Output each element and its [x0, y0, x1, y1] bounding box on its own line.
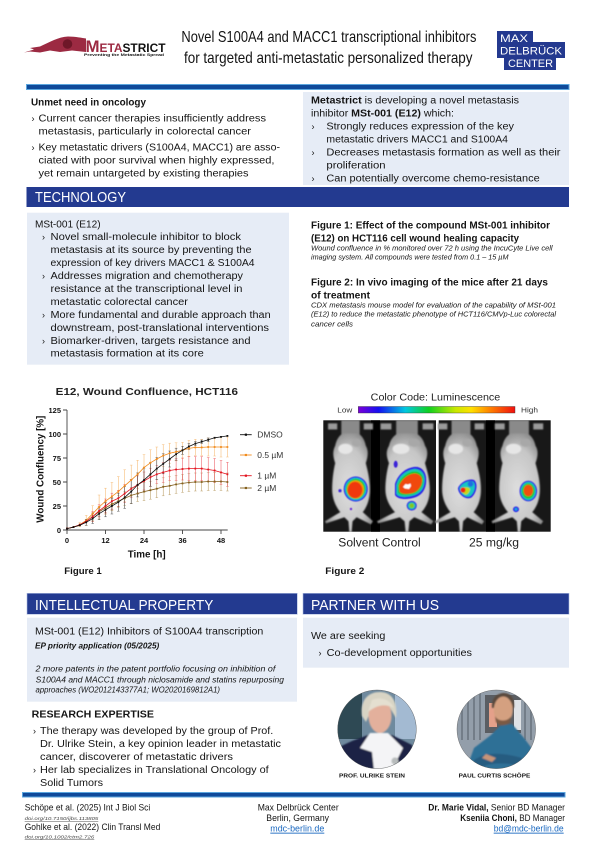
y axis tick labels: 100: [48, 430, 61, 439]
priority application: EP priority application (05/2025): [35, 640, 159, 650]
color scale: [337, 405, 538, 414]
intro text: inhibitor MSt-001 (E12) which:: [311, 109, 454, 120]
section header: technology: TECHNOLOGY: [35, 190, 126, 206]
x axis tick labels: 36: [178, 536, 187, 545]
mouse 4: [492, 420, 543, 534]
logo: Max Delbrück Center: MAX: [500, 33, 529, 45]
figure 2 caption: of treatment: [311, 290, 371, 301]
section header: intellectual property: INTELLECTUAL PROPERTY: [35, 598, 214, 614]
panel: MSt-001 (E12): [27, 213, 289, 365]
legend: [240, 431, 284, 493]
y axis tick labels: 75: [53, 454, 61, 463]
figure 2 label: Figure 2: [325, 566, 364, 576]
panel: unmet need in oncology: [31, 97, 280, 180]
figure 1 caption: Figure 1: Effect of the compound MSt-001 inhibitor: [311, 221, 550, 232]
panel: partner with us: ›: [318, 648, 322, 658]
panel: partner with us: We are seeking: [311, 631, 385, 642]
x axis tick labels: [65, 536, 225, 545]
bullet list: technology: Novel small-molecule inhibitor to block: [50, 232, 242, 243]
tumour signal mouse 2: [394, 461, 426, 511]
footer: references: [25, 803, 160, 839]
intro text: [311, 95, 519, 120]
y axis title: Wound Confluency [%]: [36, 416, 46, 523]
chart title: E12, Wound Confluence, HCT116: [56, 386, 238, 398]
logo: Max Delbrück Center: DELBRÜCK: [500, 46, 563, 58]
bullet list: technology: resistance at the transcriptional level in: [50, 284, 242, 295]
x axis tick labels: 12: [101, 536, 110, 545]
color scale: High: [521, 405, 538, 414]
y axis tick labels: 0: [57, 526, 61, 535]
error bars: 0.5 µM: [80, 437, 227, 527]
bullet list: expertise: [33, 726, 281, 789]
bullet list: unmet need: Key metastatic drivers (S100A4, MACC1) are asso-: [38, 143, 280, 154]
patent title: MSt-001 (E12) Inhibitors of S100A4 transcription: [35, 627, 263, 638]
bullet list: unmet need: ciated with poor survival when highly expressed,: [38, 156, 274, 167]
heading: unmet need: Unmet need in oncology: [31, 97, 146, 108]
bullet list: benefits: metastatic drivers MACC1 and S100A4: [326, 134, 508, 145]
caption: Paul Curtis Schöpe: PAUL CURTIS SCHÖPE: [459, 773, 531, 780]
title: Novel S100A4 and MACC1 transcriptional inhibitors: [181, 29, 476, 46]
portrait: Paul Curtis Schöpe: [456, 689, 536, 770]
series: 1 µM: [67, 469, 227, 529]
bullet list: benefits: [312, 122, 561, 185]
group labels: 25 mg/kg: [469, 538, 519, 550]
bullet list: technology: More fundamental and durable approach than: [50, 310, 271, 321]
footer: references: Gohlke et al. (2022) Clin Transl Med: [25, 822, 160, 833]
group labels: [338, 538, 519, 550]
figure: in vivo mouse imaging: [323, 393, 551, 550]
bullet list: benefits: ›: [312, 147, 314, 157]
logo: Max Delbrück Center: [497, 31, 565, 70]
bullet list: technology: ›: [42, 310, 45, 320]
legend: DMSO: [257, 431, 283, 440]
bullet list: technology: ›: [42, 232, 45, 242]
x axis title: Time [h]: [128, 550, 166, 561]
section header: partner with us: [303, 593, 569, 614]
mouse 1: [325, 420, 373, 534]
footer: address: Max Delbrück Center: [258, 803, 339, 813]
error bars: 2 µM: [93, 472, 227, 521]
bullet list: unmet need: [32, 114, 280, 180]
imaging panel: solvent control: [323, 420, 436, 534]
error bars: 1 µM: [93, 457, 227, 522]
bullet list: benefits: proliferation: [326, 160, 386, 171]
bullet list: expertise: Her lab specializes in Translational Oncology of: [40, 765, 269, 776]
series: 2 µM: [67, 482, 227, 529]
y axis tick labels: [48, 406, 61, 535]
footer: address: mdc-berlin.de: [270, 824, 324, 834]
figure 2 caption: CDX metastasis mouse model for evaluation of the capability of MSt-001: [311, 303, 556, 310]
y axis tick labels: 25: [53, 502, 61, 511]
bullet list: technology: Biomarker-driven, targets resistance and: [50, 336, 250, 347]
figure 1 label: Figure 1: [64, 566, 102, 576]
tumour signal mouse 3: [458, 480, 476, 498]
logo tagline: Preventing the Metastatic Spread: [84, 53, 164, 57]
figure 1 caption: [311, 221, 553, 262]
bullet list: technology: metastatic colorectal cancer: [50, 297, 189, 308]
bullet list: benefits: ›: [312, 122, 314, 132]
legend: 1 µM: [257, 472, 277, 481]
section: research expertise: [32, 710, 281, 789]
x axis tick labels: 0: [65, 536, 69, 545]
bullet list: expertise: Dr. Ulrike Stein, a key opinion leader in metastatic: [40, 739, 281, 750]
error bars: DMSO: [86, 438, 208, 525]
footer: contacts: bd@mdc-berlin.de: [494, 824, 564, 834]
footer: address: Berlin, Germany: [266, 813, 329, 823]
intro text: Metastrict is developing a novel metastasis: [311, 95, 519, 106]
bullet list: unmet need: metastasis, particularly in colorectal cancer: [38, 127, 252, 138]
footer: contacts: Dr. Marie Vidal, Senior BD Manager: [428, 803, 565, 813]
axes: [63, 410, 228, 534]
icon: metastatic cell: [24, 36, 86, 52]
group labels: Solvent Control: [338, 538, 421, 550]
patent portfolio note: approaches (WO2012143377A1; WO2020169812A1): [36, 685, 220, 695]
figure 2 caption: (E12) to reduce the metastatic phenotype of HCT116/CMVp-Luc colorectal: [311, 312, 556, 319]
tumour signal mouse 4: [513, 481, 537, 512]
y axis tick labels: 125: [48, 406, 61, 415]
panel heading: MSt-001 (E12): [35, 219, 101, 230]
patent portfolio note: [34, 664, 284, 695]
footer: contacts: [428, 803, 565, 834]
figure 1 caption: imaging system. All compounds were tested from 0.1 – 15 µM: [311, 255, 509, 262]
figure 1 caption: Wound confluence in % monitored over 72 h using the IncuCyte Live cell: [311, 246, 553, 253]
section header: technology: [26, 187, 569, 207]
title: for targeted anti-metastatic personalized therapy: [184, 50, 472, 67]
portrait: Prof. Ulrike Stein: [337, 689, 417, 770]
patent portfolio note: 2 more patents in the patent portfolio focusing on inhibition of: [34, 664, 277, 674]
caption: Prof. Ulrike Stein: PROF. ULRIKE STEIN: [339, 774, 405, 780]
bullet list: technology: Addresses migration and chemotherapy: [50, 271, 243, 282]
section header: intellectual property: [27, 593, 297, 614]
panel: Metastrict development: [303, 92, 569, 185]
bullet list: unmet need: yet remain untargeted by existing therapies: [38, 169, 248, 180]
bullet list: technology: [42, 232, 271, 360]
panel: intellectual property: [27, 618, 297, 702]
bullet list: benefits: ›: [312, 174, 314, 184]
color scale: Low: [337, 405, 353, 414]
bullet list: technology: ›: [42, 336, 45, 346]
patent portfolio note: S100A4 and MACC1 through niclosamide and statins repurposing: [36, 675, 284, 685]
y axis tick labels: 50: [53, 478, 61, 487]
x axis tick labels: 48: [217, 536, 225, 545]
bullet list: benefits: Can potentially overcome chemo-resistance: [326, 174, 540, 185]
bullet list: expertise: The therapy was developed by the group of Prof.: [40, 726, 273, 737]
panel: partner with us: [303, 618, 569, 668]
footer: contacts: Kseniia Choni, BD Manager: [460, 813, 565, 823]
bullet list: benefits: Strongly reduces expression of the key: [326, 122, 514, 133]
imaging panel: 25 mg/kg: [435, 420, 551, 534]
bullet list: expertise: ›: [33, 765, 36, 775]
title: [181, 29, 476, 67]
figure 2 caption: Figure 2: In vivo imaging of the mice after 21 days: [311, 278, 548, 289]
section header: partner with us: PARTNER WITH US: [311, 598, 439, 614]
logo: Metastrict: [24, 36, 166, 57]
footer: address: [258, 803, 339, 834]
figure 2 caption: [311, 278, 556, 328]
color code title: Color Code: Luminescence: [371, 393, 501, 404]
bullet list: unmet need: Current cancer therapies insufficiently address: [38, 114, 266, 125]
bullet list: benefits: Decreases metastasis formation as well as their: [326, 147, 561, 158]
bullet list: expertise: ›: [33, 726, 36, 736]
bullet list: unmet need: ›: [32, 114, 34, 124]
bullet list: unmet need: ›: [32, 143, 34, 153]
heading: RESEARCH EXPERTISE: [32, 710, 154, 721]
bullet list: technology: ›: [42, 271, 45, 281]
x axis tick labels: 24: [140, 536, 149, 545]
bullet list: technology: metastasis formation at its core: [50, 349, 204, 360]
tumour signal mouse 1: [338, 476, 368, 510]
footer: references: doi.org/10.7150/ijbs.113805: [25, 816, 99, 821]
footer: references: Schöpe et al. (2025) Int J Biol Sci: [25, 803, 150, 814]
panel: partner with us: Co-development opportunities: [327, 648, 472, 659]
logo: Max Delbrück Center: CENTER: [508, 58, 553, 70]
line chart: wound confluence: [36, 386, 284, 561]
bullet list: expertise: cancer, discoverer of metastatic drivers: [40, 752, 233, 763]
bullet list: technology: metastasis at its source by preventing the: [50, 245, 252, 256]
legend: 0.5 µM: [257, 451, 284, 460]
figure 1 caption: (E12) on HCT116 cell wound healing capacity: [311, 234, 519, 245]
series: 0.5 µM: [67, 447, 227, 529]
logo wordmark: METASTRICT: [86, 37, 166, 56]
footer: references: doi.org/10.1002/ctm2.726: [25, 834, 95, 839]
bullet list: expertise: Solid Tumors: [40, 778, 103, 789]
figure 2 caption: cancer cells: [311, 321, 354, 328]
bullet list: technology: expression of key drivers MACC1 & S100A4: [50, 258, 255, 269]
mouse 2: [377, 420, 433, 534]
bullet list: technology: downstream, post-translational interventions: [50, 323, 269, 334]
mouse 3: [435, 420, 484, 534]
legend: 2 µM: [257, 484, 277, 493]
series: DMSO: [67, 436, 227, 529]
